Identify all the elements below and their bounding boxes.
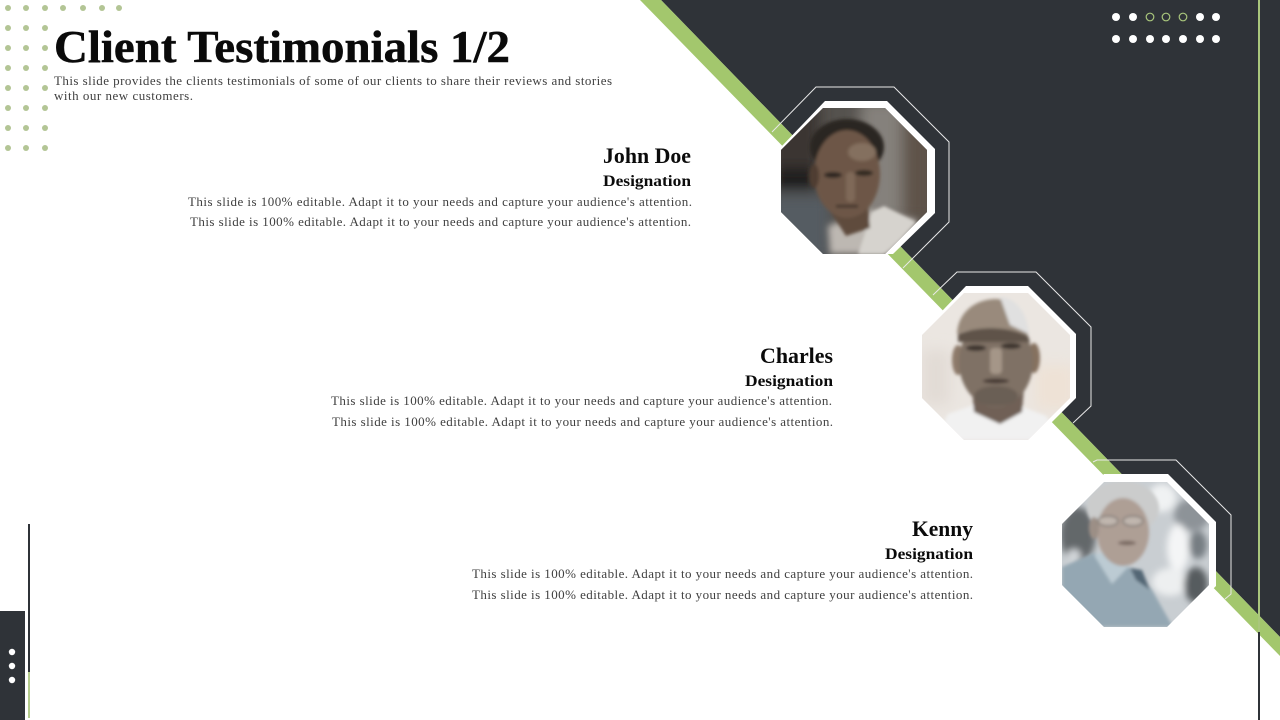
outline octagon: John Doe xyxy=(772,87,949,268)
left vertical rule xyxy=(28,524,30,718)
dark diagonal background panel xyxy=(661,0,1280,637)
dot grid: top right xyxy=(1112,13,1220,43)
green diagonal band xyxy=(640,0,1280,656)
testimonial: Charles xyxy=(331,343,833,429)
white frame: Charles xyxy=(922,286,1076,440)
testimonial: Kenny xyxy=(472,516,973,602)
dot grid: top left xyxy=(5,5,122,151)
subtitle: This slide provides the clients testimonials of some of our clients to share their reviews and stories xyxy=(54,73,612,88)
name: John Doe: John Doe xyxy=(603,143,691,168)
testimonial: John Doe xyxy=(188,143,692,229)
body text: Charles: This slide is 100% editable. Adapt it to your needs and capture your audience's attention. xyxy=(332,414,833,429)
title: Client Testimonials 1/2 xyxy=(54,22,510,72)
body text: John Doe xyxy=(188,194,692,229)
body text: John Doe: This slide is 100% editable. Adapt it to your needs and capture your audience's attention. xyxy=(188,194,692,209)
white frame: Kenny xyxy=(1062,474,1216,627)
body text: Kenny xyxy=(472,566,973,602)
designation: Kenny: Designation xyxy=(885,546,973,563)
outline octagon: Kenny xyxy=(1093,460,1231,599)
body text: Charles: This slide is 100% editable. Adapt it to your needs and capture your audience's attention. xyxy=(331,393,832,408)
outline octagon: Charles xyxy=(933,272,1091,423)
subtitle: with our new customers. xyxy=(54,88,193,103)
designation: Charles: Designation xyxy=(745,373,833,390)
photo: Kenny xyxy=(1060,481,1210,627)
body text: Kenny: This slide is 100% editable. Adapt it to your needs and capture your audience's attention. xyxy=(472,587,973,602)
body text: Charles xyxy=(331,393,833,429)
bottom left dark tab with dots xyxy=(0,611,25,720)
white frame: John Doe xyxy=(781,101,935,254)
photo: John Doe xyxy=(781,108,927,254)
photo: Charles xyxy=(922,293,1075,440)
body text: Kenny: This slide is 100% editable. Adapt it to your needs and capture your audience's attention. xyxy=(472,566,973,581)
right vertical rule xyxy=(1258,0,1260,720)
body text: John Doe: This slide is 100% editable. Adapt it to your needs and capture your audience's attention. xyxy=(190,214,691,229)
subtitle xyxy=(54,73,612,103)
name: Kenny: Kenny xyxy=(912,516,973,541)
name: Charles: Charles xyxy=(760,343,833,368)
designation: John Doe: Designation xyxy=(603,173,691,190)
